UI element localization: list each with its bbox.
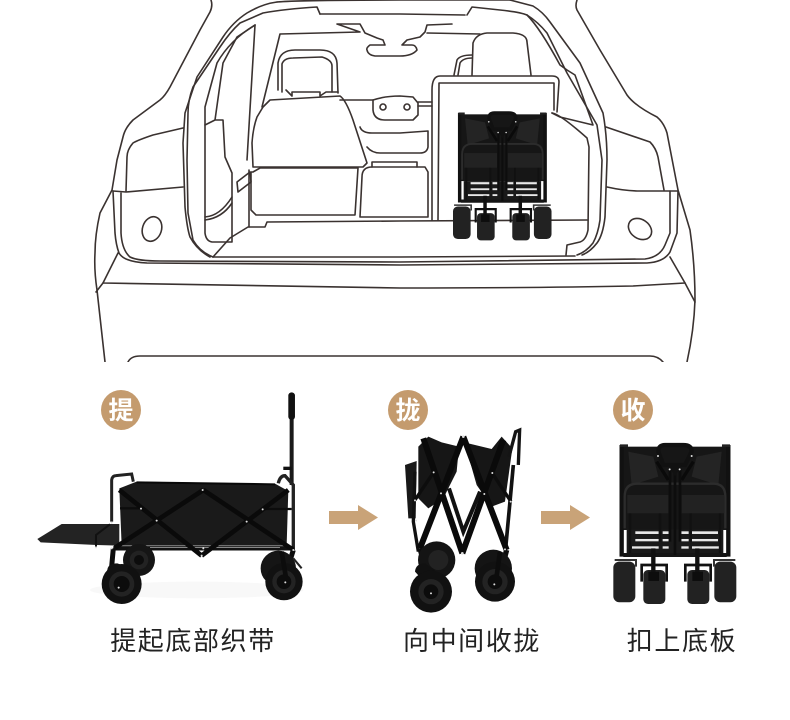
trunk opening frame — [183, 0, 607, 257]
step 1 badge: 提 — [108, 397, 134, 425]
folded wagon, front view — [613, 445, 736, 604]
arrow 2 — [541, 505, 590, 530]
step 3 badge — [613, 390, 653, 430]
left pillar and side wall — [205, 25, 255, 242]
car body outline — [95, 0, 695, 362]
white cover below car — [0, 362, 790, 720]
step 3 badge: 收 — [620, 397, 646, 425]
caption: step 3: 扣上底板 — [627, 626, 737, 656]
step 2 badge: 拢 — [395, 397, 421, 425]
arrow 1 — [329, 505, 378, 530]
step 1 badge — [101, 390, 141, 430]
wagon with lifted floor board — [37, 396, 303, 604]
trunk board and panel — [432, 76, 589, 255]
step 2 badge — [388, 390, 428, 430]
trunk floor — [213, 220, 587, 257]
caption: step 1: 提起底部织带 — [110, 626, 276, 656]
left taillight — [113, 128, 183, 244]
front seat with headrest — [251, 24, 480, 215]
half-folded wagon — [405, 430, 520, 613]
right taillight — [606, 127, 678, 244]
car trunk line drawing — [95, 0, 695, 362]
centre console — [340, 96, 432, 217]
folded wagon in trunk — [453, 113, 552, 240]
caption: step 2: 向中间收拢 — [403, 626, 541, 656]
rear seat — [454, 33, 531, 75]
